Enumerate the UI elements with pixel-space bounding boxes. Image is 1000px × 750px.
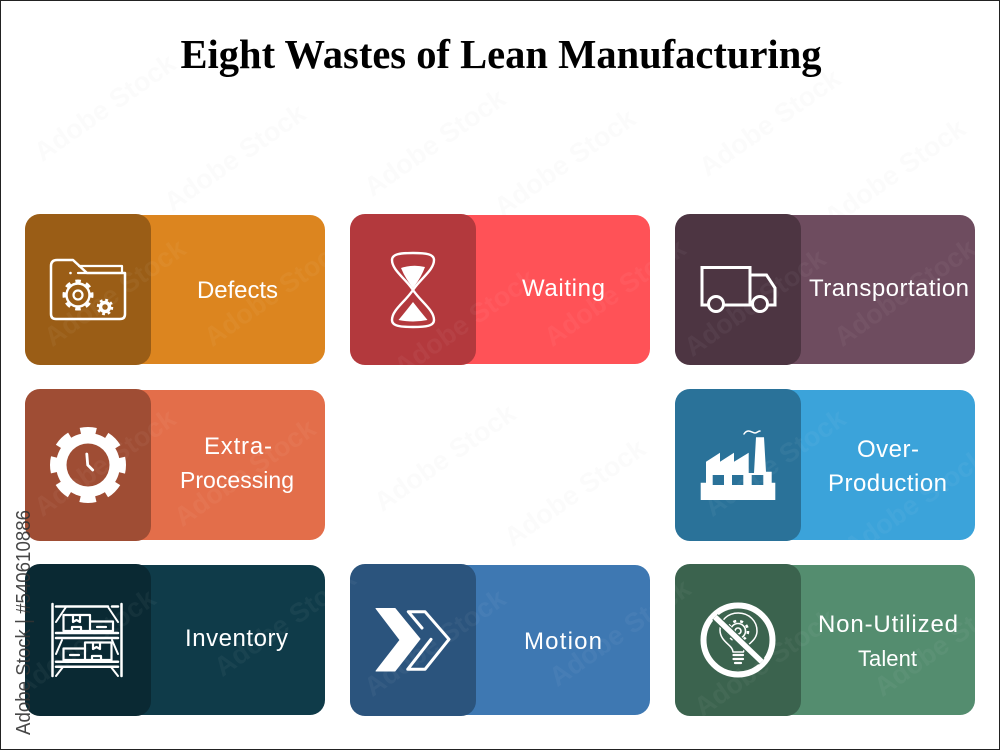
watermark layer over cards: Adobe Stock <box>209 562 362 682</box>
card background: Defects <box>25 215 325 364</box>
icon: delivery truck <box>702 268 775 312</box>
panel: Transportation <box>675 214 975 365</box>
panel: Extra-Processing <box>25 389 325 541</box>
label: Over-Production: Over- <box>857 436 919 463</box>
watermark layer over cards: Adobe Stock <box>9 582 162 702</box>
watermark layer over cards: Adobe Stock <box>679 242 832 362</box>
watermark layer over cards: Adobe Stock <box>39 232 192 352</box>
label: Over-Production: Production <box>828 470 947 497</box>
label: Non-Utilized Talent: Talent <box>858 646 917 671</box>
icon: crossed-out light bulb with gear <box>704 606 772 674</box>
icon tile: Transportation <box>675 214 801 365</box>
card background: Transportation <box>675 215 975 364</box>
watermark layer over cards: Adobe Stock <box>539 232 692 352</box>
watermark layer over cards: Adobe Stock <box>544 572 697 692</box>
label: Non-Utilized Talent: Non-Utilized <box>818 611 958 638</box>
label: Non-Utilized Talent <box>818 611 958 671</box>
label: Transportation: Transportation <box>809 275 969 302</box>
card background: Motion <box>350 565 650 715</box>
label: Motion: Motion <box>524 628 602 655</box>
card background: Waiting <box>350 215 650 364</box>
stock image ID, vertical text: Adobe Stock | #540610886 <box>13 510 35 735</box>
label: Over-Production <box>828 436 947 497</box>
watermark layer over cards: Adobe Stock <box>689 602 842 722</box>
label: Waiting: Waiting <box>522 275 605 302</box>
panel: Non-Utilized Talent <box>675 564 975 716</box>
icon: folder with gears <box>51 260 125 319</box>
icon: double chevron arrow <box>376 608 449 671</box>
icon tile: Defects <box>25 214 151 365</box>
watermark layer over cards: Adobe Stock <box>699 402 852 522</box>
card background: Extra-Processing <box>25 390 325 540</box>
watermark layer over cards: Adobe Stock <box>359 582 512 702</box>
icon tile: Motion <box>350 564 476 716</box>
watermark layer over cards: Adobe Stock <box>839 442 992 562</box>
watermark layer on background <box>29 47 972 552</box>
label: Inventory: Inventory <box>185 625 288 652</box>
watermark layer over cards: Adobe Stock <box>829 232 982 352</box>
icon tile: Extra-Processing <box>25 389 151 541</box>
panel: Waiting <box>350 214 650 365</box>
icon: gear with clock <box>54 431 122 499</box>
label: Extra-Processing: Processing <box>180 467 294 493</box>
panel: Over-Production <box>675 389 975 541</box>
watermark layer over cards: Adobe Stock <box>389 262 542 382</box>
title: Eight Wastes of Lean Manufacturing <box>180 31 822 77</box>
label: Extra-Processing <box>180 433 294 493</box>
icon: warehouse shelves with boxes <box>52 604 122 676</box>
card background: Over-Production <box>675 390 975 540</box>
panel: Defects <box>25 214 325 365</box>
watermark layer over cards: Adobe Stock <box>199 232 352 352</box>
label: Defects: Defects <box>197 277 278 304</box>
watermark layer over cards: Adobe Stock <box>29 402 182 522</box>
icon: hourglass <box>392 253 434 327</box>
icon tile: Inventory <box>25 564 151 716</box>
icon tile: Non-Utilized Talent <box>675 564 801 716</box>
icon tile: Waiting <box>350 214 476 365</box>
watermark layer over cards <box>9 232 1000 722</box>
card background: Inventory <box>25 565 325 715</box>
panel: Motion <box>350 564 650 716</box>
icon: factory <box>701 431 775 500</box>
watermark layer over cards: Adobe Stock <box>169 412 322 532</box>
card background: Non-Utilized Talent <box>675 565 975 715</box>
label: Extra-Processing: Extra- <box>204 433 272 460</box>
icon tile: Over-Production <box>675 389 801 541</box>
panel: Inventory <box>25 564 325 716</box>
